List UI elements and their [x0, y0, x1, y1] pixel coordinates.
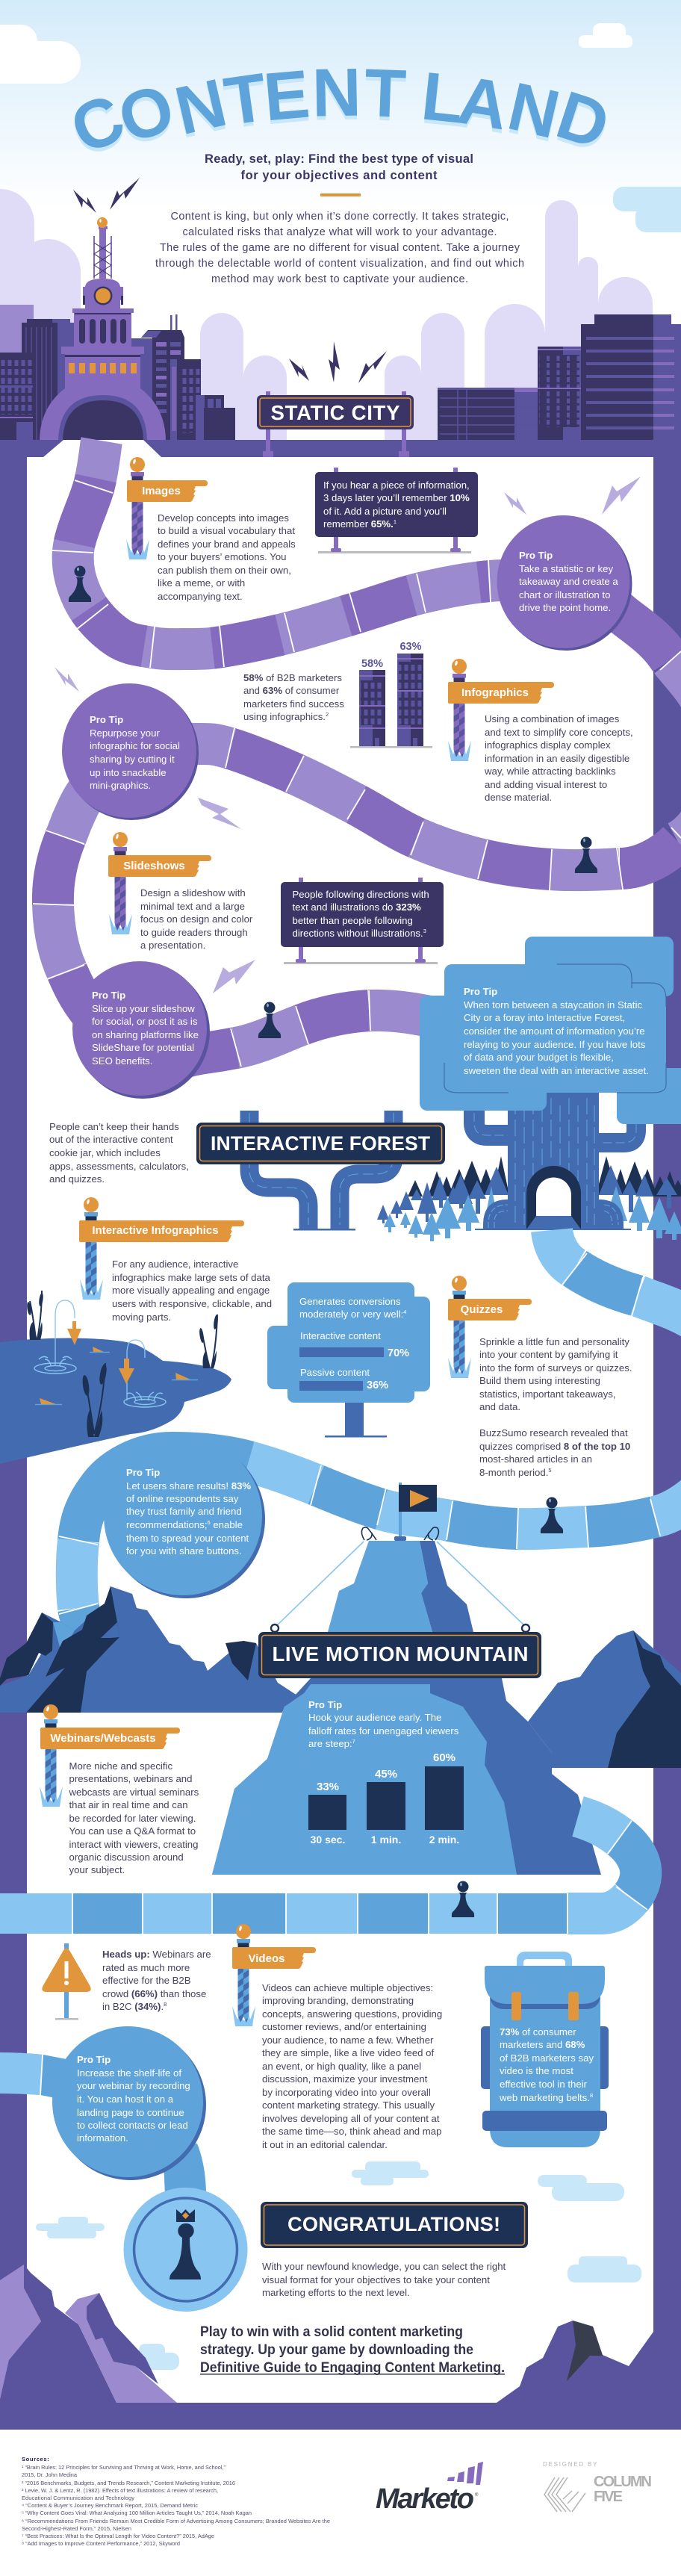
sign: quizzes	[448, 1299, 532, 1320]
icon: king pawn	[170, 2223, 201, 2279]
bar sign: conversions	[267, 1282, 430, 1437]
illustration: bottom right mountain	[497, 2321, 653, 2403]
text: interactive forest intro	[49, 1121, 189, 1185]
text: infographic stat: using infographics.	[243, 711, 326, 722]
pro tip: share results: them to spread your content	[126, 1533, 249, 1544]
panel: infographics	[448, 659, 633, 803]
billboard: memory stat: 1	[394, 518, 397, 525]
sign: live motion mountain: LIVE MOTION MOUNTAIN	[272, 1642, 529, 1666]
text: videos: discussion, maximize your investment	[262, 2073, 428, 2085]
bar chart: viewer falloff: 30 sec.	[311, 1834, 345, 1846]
text: videos: improving branding, demonstrating	[262, 1995, 414, 2006]
text: interactive forest intro: out of the interactive content	[49, 1134, 173, 1145]
bar chart: viewer falloff: 2 min.	[429, 1834, 459, 1846]
text: videos: an event, or high quality, like a panel	[262, 2061, 421, 2072]
text: interactive infographics: more visually appealing and engage	[112, 1285, 270, 1296]
billboard: directions stat: better than people following	[293, 915, 413, 926]
pro tip: repurpose: infographic for social	[90, 740, 180, 751]
billboard: memory stat: If you hear a piece of information,	[323, 479, 470, 491]
pro tip: slice up slideshow: SlideShare for potential	[92, 1042, 194, 1053]
text: videos: content marketing strategy. This usually	[262, 2099, 435, 2111]
pro tip text: falloff: Pro Tip	[308, 1699, 342, 1710]
sign: images	[127, 480, 208, 502]
buildings: tower right group	[131, 314, 235, 440]
pro tip: statistic: takeaway and create a	[519, 576, 618, 587]
pawn: forest path	[541, 1497, 563, 1533]
sign: live motion mountain	[258, 1632, 541, 1678]
text: slideshows: minimal text and a large	[140, 901, 245, 912]
intro paragraph: through the delectable world of content visualization, and find out which	[155, 258, 524, 270]
ripples	[34, 1356, 166, 1407]
pro tip text: falloff: 7	[352, 1738, 355, 1745]
panel: slideshows	[108, 832, 253, 951]
sign label: images: Images	[142, 485, 181, 497]
pro tip: repurpose: mini-graphics.	[90, 780, 151, 791]
bar: passive content	[299, 1367, 388, 1391]
callout: heads up: in B2C (34%).	[102, 2001, 164, 2012]
callout: heads up: effective for the B2B	[102, 1975, 191, 1986]
king medallion	[124, 2188, 248, 2312]
logo: marketo: Marketo	[376, 2483, 474, 2515]
pro tip text: falloff: Hook your audience early. The	[308, 1712, 441, 1723]
callout: heads up: crowd (66%) than those	[102, 1988, 206, 1999]
panel: images	[126, 457, 296, 602]
subtitle: Ready, set, play: Find the best type of visual	[205, 152, 473, 166]
pro tip text: staycation: Pro Tip	[464, 986, 497, 997]
branches behind forest sign	[249, 1111, 394, 1231]
billboard: directions stat	[281, 878, 444, 964]
call to action: Definitive Guide to Engaging Content Marketing.	[200, 2360, 505, 2376]
road entry	[43, 440, 161, 457]
text: interactive forest intro: People can’t keep their hands	[49, 1121, 179, 1132]
intro paragraph: calculated risks that analyze what will work to your advantage.	[182, 226, 497, 238]
pro tip text: falloff: are steep:	[308, 1738, 352, 1749]
sign: interactive infographics	[79, 1220, 244, 1242]
pro tip text: falloff	[308, 1699, 459, 1749]
bar: interactive content	[299, 1330, 409, 1359]
text: quizzes	[479, 1336, 632, 1478]
sign heading: Generates conversions	[299, 1296, 401, 1307]
ropes and hooks	[271, 1527, 529, 1632]
signpost: infographics	[448, 659, 471, 761]
pro tip: repurpose: up into snackable	[90, 767, 167, 778]
reeds	[30, 1291, 217, 1434]
text: infographics: dense material.	[485, 792, 552, 803]
pro tip: statistic: drive the point home.	[519, 602, 611, 613]
sign label: webinars: Webinars/Webcasts	[50, 1732, 156, 1745]
pro tip: shelf-life: information.	[77, 2132, 128, 2144]
pro tip: share results: they trust family and friend	[126, 1506, 242, 1517]
board path: interactive forest	[59, 1230, 681, 1643]
text: videos: it out in an editorial calendar.	[262, 2139, 388, 2150]
illustration: backpack	[481, 1952, 609, 2147]
text: images: accompanying text.	[158, 591, 243, 602]
text: webinars	[69, 1760, 199, 1875]
intro paragraph	[155, 211, 524, 285]
text: infographics: infographics display complex	[485, 739, 611, 751]
sources: 2015, Dr. John Medina	[22, 2471, 78, 2478]
text: webinars: your subject.	[69, 1864, 125, 1875]
text: webinars: organic discussion around	[69, 1852, 184, 1863]
illustration: backpack: web marketing belts.	[500, 2092, 590, 2103]
sign heading	[299, 1296, 406, 1320]
call to action: strategy. Up your game by downloading the	[200, 2342, 473, 2358]
text: images: defines your brand and appeals	[158, 539, 296, 550]
text: videos: involves developing all of your content at	[262, 2113, 440, 2124]
bar chart: viewer falloff: 45%	[375, 1768, 397, 1781]
lightning bolts over tower	[73, 178, 140, 213]
pro tip: share results: of online respondents say	[126, 1493, 239, 1504]
text: images: to build a visual vocabulary that	[158, 525, 295, 536]
title: CONTENT LAND	[60, 55, 618, 169]
billboard: memory stat: 3 days later you’ll remember 10%	[323, 492, 470, 503]
text: videos: concepts, answering questions, providing	[262, 2008, 442, 2020]
pro tip: shelf-life: landing page to continue	[77, 2107, 184, 2118]
illustration: bottom left mountains	[0, 2265, 177, 2403]
text: quizzes: most-shared articles in an	[479, 1453, 592, 1465]
title: CONTENT LAND	[60, 58, 618, 173]
sign: static city: STATIC CITY	[270, 401, 400, 424]
billboard: directions stat: People following directions with	[293, 889, 429, 900]
bar: interactive content: Interactive content	[300, 1330, 381, 1341]
text: infographics: Using a combination of images	[485, 713, 620, 724]
text: quizzes: into the form of surveys or quizzes.	[479, 1362, 632, 1374]
pro tip text: staycation: relaying to your audience. If you have lots	[464, 1039, 646, 1050]
text: infographic stat: marketers find success	[243, 698, 344, 710]
pro tip: slice up slideshow: Pro Tip	[92, 990, 125, 1001]
text: videos: Videos can achieve multiple objectives:	[262, 1982, 433, 1993]
pro tip: repurpose: Repurpose your	[90, 727, 160, 739]
pro tip: shelf-life: it. You can host it on a	[77, 2094, 174, 2105]
pro tip: slice up slideshow: SEO benefits.	[92, 1055, 152, 1067]
sign: infographics	[448, 682, 554, 704]
pro tip text: staycation: City or a foray into Interactive Forest,	[464, 1012, 625, 1023]
static city posts	[263, 391, 409, 457]
text: videos: customer reviews, and/or entertaining	[262, 2021, 426, 2032]
text: infographics: and text to simplify core concepts,	[485, 727, 633, 738]
pro tip: shelf-life: Pro Tip	[77, 2054, 111, 2065]
bar chart: viewer falloff	[308, 1751, 464, 1846]
text: interactive infographics	[112, 1258, 272, 1323]
billboard: memory stat: of it. Add a picture and you’ll	[323, 506, 447, 517]
text: images	[158, 512, 296, 602]
pro tip: share results: Let users share results! 83%	[126, 1480, 251, 1492]
sign: static city	[257, 395, 414, 429]
logo: column five: FIVE	[594, 2489, 623, 2505]
sign label: interactive infographics: Interactive Infographics	[92, 1224, 219, 1237]
pro tip: slice up slideshow: for social, or post it as is	[92, 1016, 198, 1027]
pro tip: share results: Pro Tip	[126, 1467, 160, 1478]
pro tip: share results: 6	[207, 1519, 211, 1526]
sign heading: moderately or very well:	[299, 1309, 403, 1320]
text: quizzes: Sprinkle a little fun and personality	[479, 1336, 629, 1347]
text: quizzes: BuzzSumo research revealed that	[479, 1427, 628, 1438]
sign label: videos: Videos	[249, 1952, 284, 1965]
text: quizzes: Build them using interesting	[479, 1375, 600, 1386]
logo: column five: DESIGNED BY	[543, 2461, 598, 2468]
sources: ⁵ “Why Content Goes Viral: What Analyzing 100 Million Articles Taught Us,” 2014, Noah Kagan	[22, 2510, 252, 2516]
sign heading: 4	[403, 1309, 406, 1315]
logo: column five: COLUMN	[594, 2474, 652, 2490]
pro tip: slice up slideshow: Slice up your slideshow	[92, 1003, 195, 1014]
illustration: right mountain	[528, 1630, 681, 1768]
illustration: backpack: video is the most	[500, 2065, 573, 2076]
text: quizzes: 8-month period.	[479, 1467, 548, 1478]
clouds: bottom	[36, 2161, 641, 2370]
text: slideshows	[140, 887, 253, 951]
lightning: static city decorations	[55, 477, 641, 993]
sources: ⁴ “Content & Buyer’s Journey Benchmark Report, 2015, Demand Metric	[22, 2502, 198, 2509]
text: images: like a meme, or with	[158, 577, 245, 589]
pro tip: share results: enable	[211, 1519, 243, 1530]
illustration: backpack: of B2B marketers say	[500, 2052, 594, 2064]
pro tip text: staycation: When torn between a staycation in Static	[464, 999, 642, 1011]
signpost: quizzes	[448, 1276, 471, 1378]
text: congratulations: visual format for your objectives to take your content	[262, 2274, 490, 2285]
sources: ² “2016 Benchmarks, Budgets, and Trends Research,” Content Marketing Institute, 2016	[22, 2480, 235, 2486]
text: interactive forest intro: cookie jar, which includes	[49, 1147, 161, 1158]
text: webinars: presentations, webinars and	[69, 1773, 192, 1784]
pro tip: slice up slideshow: on sharing platforms like	[92, 1029, 199, 1040]
sign: videos	[232, 1947, 316, 1969]
sign: interactive forest	[196, 1123, 445, 1164]
call to action	[200, 2324, 505, 2376]
sources: ¹ “Brain Rules: 12 Principles for Surviving and Thriving at Work, Home, and School,”	[22, 2464, 226, 2471]
game board path: static city	[33, 441, 681, 1067]
pro tip text: staycation: sweeten the deal with an interactive asset.	[464, 1065, 649, 1076]
billboard: memory stat: remember 65%.	[323, 518, 394, 530]
board path: live motion	[0, 1816, 647, 2196]
logo: marketo: ®	[475, 2492, 479, 2498]
panel: quizzes	[448, 1276, 632, 1478]
sign label: slideshows: Slideshows	[123, 860, 185, 872]
chart: infographic towers: 63%	[399, 641, 422, 653]
buildings: right group	[438, 314, 681, 440]
text: slideshows: to guide readers through	[140, 927, 248, 938]
pro tip: statistic: chart or illustration to	[519, 589, 610, 600]
pro tip: statistic: Pro Tip	[519, 550, 553, 561]
pawn: live motion path	[452, 1881, 474, 1917]
text: webinars: You can use a Q&A format to	[69, 1825, 196, 1837]
illustration: backpack: marketers and 68%	[500, 2039, 585, 2050]
logo: marketo	[376, 2462, 483, 2515]
text: quizzes: 5	[548, 1467, 552, 1474]
pro tip: shelf-life: Increase the shelf-life of	[77, 2067, 181, 2079]
sources: ⁷ “Best Practices: What Is the Optimal Length for Video Content?” 2015, AdAge	[22, 2533, 214, 2539]
text: interactive forest intro: and quizzes.	[49, 1173, 105, 1185]
bar chart: viewer falloff: 60%	[433, 1751, 455, 1764]
sign label: infographics: Infographics	[461, 686, 529, 699]
pro tip: shelf-life: to collect contacts or lead	[77, 2120, 188, 2131]
text: congratulations: With your newfound knowledge, you can select the right	[262, 2261, 506, 2272]
sources	[22, 2456, 330, 2547]
pawn: static city 3	[258, 1002, 281, 1038]
text: quizzes: and data.	[479, 1401, 520, 1412]
bar: interactive content: 70%	[388, 1347, 409, 1359]
panel: webinars	[40, 1704, 199, 1875]
flag on peak	[394, 1483, 437, 1541]
text: interactive infographics: infographics make large sets of data	[112, 1272, 271, 1283]
fins	[40, 1347, 190, 1404]
chart: infographic towers	[350, 641, 432, 748]
sign: interactive forest: INTERACTIVE FOREST	[211, 1132, 430, 1155]
forest tree layer	[377, 1156, 681, 1241]
white panel	[27, 457, 653, 2403]
lightning bolts over sign	[289, 341, 387, 383]
sky background	[0, 0, 681, 209]
pro tip text: staycation: of data and your budget is flexible,	[464, 1052, 614, 1063]
pro tip: share results: recommendations;	[126, 1519, 207, 1530]
bar: passive content: 36%	[367, 1379, 388, 1391]
pro tip: share results	[104, 1437, 265, 1598]
text: infographic stat: 2	[326, 711, 329, 718]
reed heads and leaves	[26, 1293, 219, 1437]
signpost: slideshows	[109, 832, 132, 934]
pro tip text: staycation: consider the amount of information you’re	[464, 1025, 645, 1037]
tree canopy: pro tip	[420, 937, 681, 1124]
pro tip text: falloff: falloff rates for unengaged viewers	[308, 1725, 459, 1737]
billboard: directions stat: directions without illustrations.	[293, 928, 423, 939]
pro tip: repurpose: sharing by cutting it	[90, 754, 175, 765]
billboard: directions stat: 3	[423, 928, 426, 934]
callout: heads up	[42, 1943, 211, 2020]
text: infographic stat: and 63% of consumer	[243, 685, 340, 696]
text: videos: your audience, to name a few. Whether	[262, 2035, 434, 2046]
sign: webinars	[40, 1728, 180, 1749]
pro tip: slice up slideshow	[72, 961, 210, 1099]
lavender city clouds	[0, 189, 653, 488]
text: interactive infographics: users with responsive, clickable, and	[112, 1298, 272, 1309]
intro paragraph: The rules of the game are no different for visual content. Take a journey	[160, 242, 520, 254]
text: congratulations: marketing efforts to the next level.	[262, 2287, 410, 2298]
pro tip: share results: for you with share buttons.	[126, 1545, 242, 1557]
subtitle: for your objectives and content	[240, 169, 438, 182]
tree: arms and trunk	[474, 1093, 636, 1230]
illustration: pond	[0, 1291, 231, 1464]
text: slideshows: focus on design and color	[140, 913, 253, 925]
pawn: static city 2	[575, 837, 597, 873]
sources: ⁶ “Recommendations From Friends Remain Most Credible Form of Advertising Among Consumers; Branded Websites Are the	[22, 2518, 330, 2524]
text: webinars: interact with viewers, creating	[69, 1839, 198, 1850]
logo: column five	[543, 2461, 652, 2512]
buildings: left group	[0, 305, 75, 440]
signpost: interactive infographics	[80, 1197, 103, 1300]
sources: Sources:	[22, 2456, 49, 2462]
signpost: videos	[232, 1924, 255, 2026]
billboard: memory stat	[315, 468, 478, 553]
text: images: to your buyers’ emotions. You	[158, 551, 287, 562]
illustration: backpack: 73% of consumer	[500, 2026, 576, 2037]
text: slideshows: Design a slideshow with	[140, 887, 246, 899]
signpost: images	[126, 457, 149, 559]
icon: crown	[176, 2209, 195, 2222]
text: congratulations	[262, 2261, 506, 2298]
chart: infographic towers: 58%	[361, 658, 383, 670]
illustration: backpack: 8	[590, 2092, 593, 2099]
sign: slideshows	[108, 855, 211, 877]
bar: passive content: Passive content	[300, 1367, 370, 1378]
text: webinars: More niche and specific	[69, 1760, 172, 1772]
billboard: directions stat: text and illustrations do 323%	[293, 901, 421, 913]
sign: congratulations: CONGRATULATIONS!	[287, 2212, 500, 2235]
bar chart: viewer falloff: 1 min.	[371, 1834, 401, 1846]
text: videos: by incorporating video into your overall	[262, 2087, 431, 2098]
callout: heads up: Heads up: Webinars are	[102, 1949, 211, 1960]
text: interactive infographics: moving parts.	[112, 1312, 171, 1323]
text: interactive forest intro: apps, assessments, calculators,	[49, 1161, 189, 1172]
pro tip: statistic	[497, 515, 632, 651]
fountain arcs	[55, 1300, 145, 1400]
pro tip: statistic: Take a statistic or key	[519, 563, 613, 574]
text: videos: they are simple, like a live video feed of	[262, 2047, 435, 2058]
pro tip: shelf-life	[52, 2026, 206, 2180]
panel: videos	[232, 1924, 442, 2150]
intro paragraph: method may work best to captivate your audience.	[211, 273, 468, 285]
text: infographics: way, while attracting backlinks	[484, 766, 616, 777]
text: infographics	[484, 713, 633, 803]
text: infographic stat	[243, 672, 344, 722]
pro tip: repurpose	[62, 683, 199, 820]
text: infographic stat: 58% of B2B marketers	[243, 672, 342, 683]
arrows	[67, 1321, 81, 1345]
sign label: quizzes: Quizzes	[461, 1303, 503, 1316]
text: quizzes: into your content by gamifying it	[479, 1349, 618, 1360]
sources: ³ Levie, W. J. & Lentz, R. (1982). Effects of text illustrations: A review of research,	[22, 2487, 218, 2494]
text: webinars: that air in real time and can	[69, 1799, 188, 1810]
intro paragraph: Content is king, but only when it’s done correctly. It takes strategic,	[170, 211, 509, 223]
callout: heads up: rated as much more	[102, 1962, 190, 1973]
bar chart: viewer falloff: 33%	[317, 1781, 339, 1793]
pro tip: shelf-life: your webinar by recording	[77, 2080, 190, 2091]
panel: interactive infographics	[79, 1197, 272, 1323]
text: slideshows: a presentation.	[140, 940, 205, 951]
text: quizzes: statistics, important takeaways,	[479, 1388, 615, 1400]
sources: ⁸ “Add Images to Improve Content Performance,” 2012, Skyword	[22, 2540, 180, 2547]
text: infographics: and adding visual interest to	[485, 779, 607, 790]
text: videos	[262, 1982, 442, 2150]
text: webinars: webcasts are virtual seminars	[69, 1787, 199, 1798]
subtitle	[205, 152, 473, 182]
text: images: Develop concepts into images	[158, 512, 289, 524]
pro tip: repurpose: Pro Tip	[90, 714, 123, 725]
illustration: backpack: effective tool in their	[500, 2079, 588, 2090]
text: images: can publish them on their own,	[158, 565, 291, 576]
text: quizzes: quizzes comprised 8 of the top 10	[479, 1441, 630, 1452]
text: videos: the same time—so, think ahead and map	[262, 2126, 441, 2137]
illustration: main mountain	[212, 1541, 601, 1875]
text: interactive infographics: For any audience, interactive	[112, 1258, 238, 1270]
clock tower	[40, 217, 166, 440]
sources: Educational Communication and Technology	[22, 2495, 134, 2501]
clouds: sky	[0, 23, 681, 232]
pro tip text: staycation	[464, 986, 649, 1076]
callout: heads up: 8	[164, 2001, 167, 2008]
purple frame	[0, 440, 681, 2430]
orange divider	[320, 193, 361, 196]
sources: Second-Highest-Rated Form,” 2015, Nielsen	[22, 2525, 131, 2532]
sign: congratulations	[261, 2202, 528, 2248]
signpost: webinars	[40, 1704, 63, 1807]
call to action: Play to win with a solid content marketing	[200, 2324, 463, 2340]
text: infographics: information in an easily digestible	[485, 753, 629, 764]
illustration: left mountains	[0, 1586, 297, 1713]
pawn: static city 1	[69, 566, 91, 602]
text: webinars: be recorded for later viewing.	[69, 1813, 196, 1824]
